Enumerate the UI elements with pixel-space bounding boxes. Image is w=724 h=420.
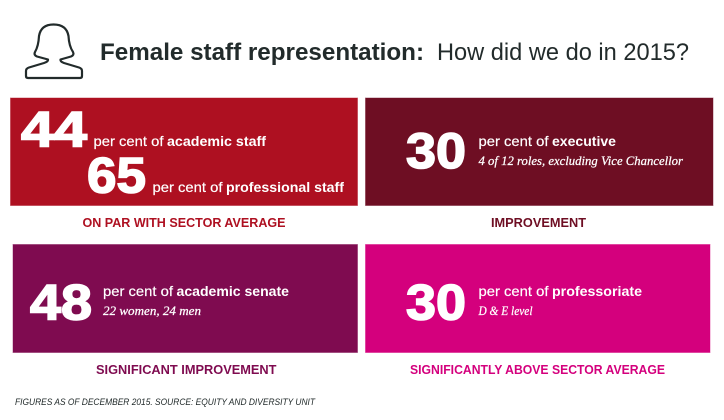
icon: female silhouette [26,24,82,78]
stat: 30 per cent of executive: executive [552,133,616,149]
stat: 30 per cent of executive [406,123,684,179]
label: on par with sector average: ON PAR WITH SECTOR AVERAGE [82,216,286,230]
label: improvement: IMPROVEMENT [491,216,586,230]
stat: 30 per cent of executive: 4 of 12 roles, excluding Vice Chancellor [478,153,684,168]
panel: academic and professional staff [10,98,358,206]
panel: executive [366,98,713,206]
stat: 30 per cent of professoriate: 30 [406,274,466,330]
stat: 30 per cent of executive: 30 [406,123,466,179]
stat: 65 per cent of professional staff: 65 [87,148,146,204]
title: Female staff representation: [100,39,424,66]
stat: 44 per cent of academic staff [21,102,266,158]
stat: 30 per cent of professoriate [406,274,642,330]
stat: 48 per cent of academic senate [30,274,289,330]
title [100,39,689,66]
panel: academic senate [13,244,358,352]
stat: 30 per cent of professoriate: per cent of [478,283,549,299]
stat: 65 per cent of professional staff: professional staff [226,179,344,195]
stat: 65 per cent of professional staff [87,148,344,204]
panel: professoriate [366,244,710,352]
label: significant improvement: SIGNIFICANT IMPROVEMENT [96,363,277,377]
stat: 30 per cent of professoriate: professoriate [552,283,642,299]
footnote: FIGURES AS OF DECEMBER 2015. SOURCE: EQUITY AND DIVERSITY UNIT [15,397,316,408]
stat: 30 per cent of professoriate: D & E level [478,303,533,318]
stat: 48 per cent of academic senate: 22 women, 24 men [103,303,201,318]
stat: 48 per cent of academic senate: 48 [30,274,92,330]
stat: 48 per cent of academic senate: academic senate [176,283,289,299]
stat: 65 per cent of professional staff: per cent of [152,179,223,195]
label: significantly above sector average: SIGNIFICANTLY ABOVE SECTOR AVERAGE [410,363,665,377]
stat: 30 per cent of executive: per cent of [478,133,549,149]
title: How did we do in 2015? [437,39,689,66]
stat: 48 per cent of academic senate: per cent of [103,283,173,299]
stat: 44 per cent of academic staff: 44 [21,102,87,158]
stat: 44 per cent of academic staff: academic staff [167,133,266,149]
stat: 44 per cent of academic staff: per cent of [94,133,164,149]
